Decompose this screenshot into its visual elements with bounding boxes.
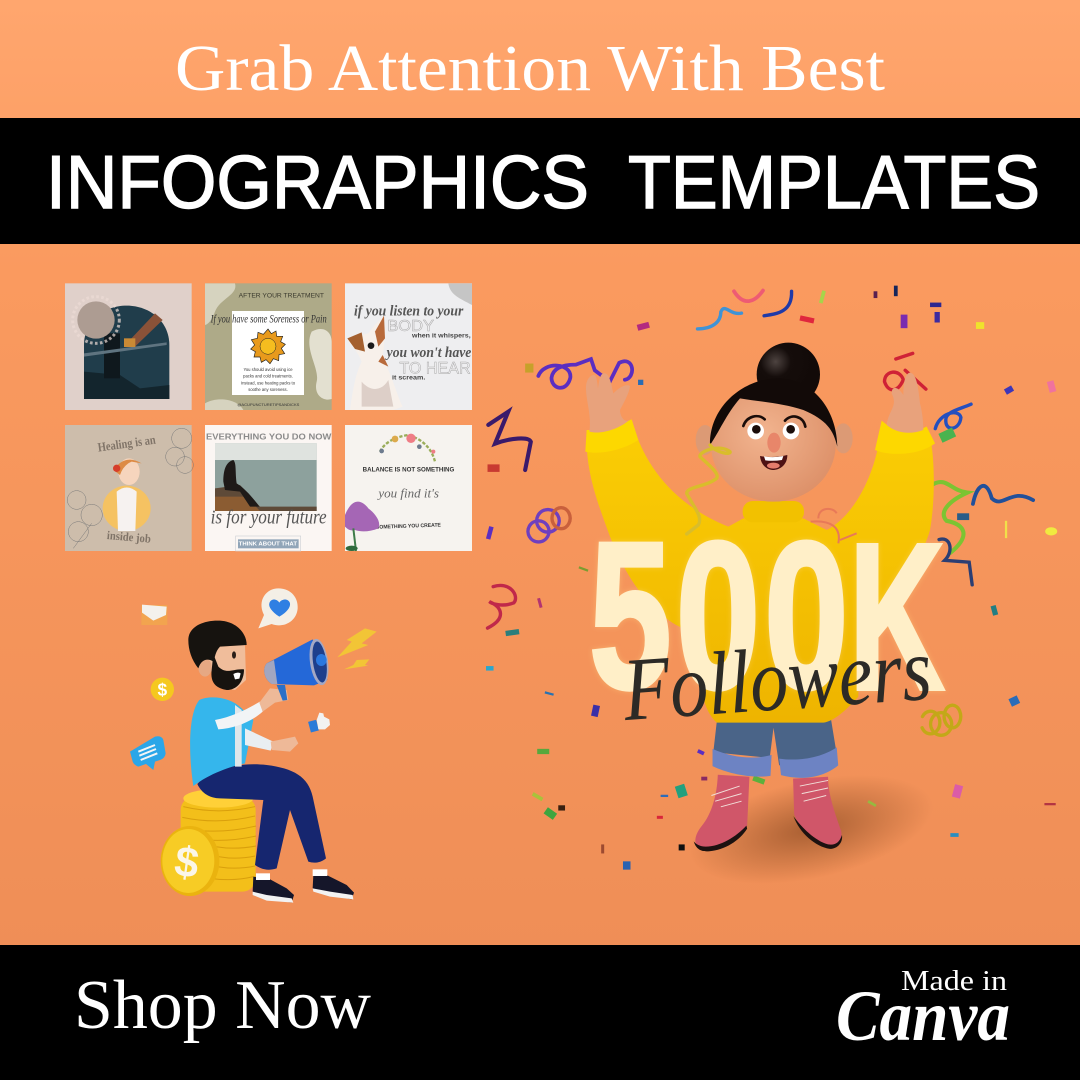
script word Followers: Followers [619, 620, 935, 740]
head [711, 388, 836, 502]
icon: dollar coin small: $ [158, 680, 168, 700]
thumbnail: listen to your body: when it whispers, [411, 333, 471, 340]
icon: chat bubble [130, 736, 166, 770]
thumbnail: everything you do now: THINK ABOUT THAT [239, 541, 298, 547]
character upper body, 500K and Followers [585, 343, 944, 740]
thumbnail: after your treatment: soothe any soreness. [248, 387, 288, 392]
template thumbnails grid [65, 283, 472, 551]
banner: infographics templates: INFOGRAPHICS [46, 140, 589, 224]
megaphone [264, 638, 331, 701]
thumbnail: listen to your body: you won't have [385, 345, 472, 361]
beard [211, 654, 244, 690]
illustration: man with megaphone on coins [130, 588, 377, 903]
arm lower [245, 728, 273, 751]
sweater body and arms [585, 419, 935, 723]
icon: heart speech bubble [258, 588, 298, 628]
thumbnail: balance: BALANCE IS NOT SOMETHING [363, 467, 455, 473]
big number 500K: K [849, 501, 944, 734]
boots [694, 775, 842, 851]
icon: dollar coin small [151, 678, 174, 701]
hair [710, 378, 837, 447]
thumbnail: everything you do now: is for your future [211, 506, 327, 528]
thumbnail: healing: Healing is an [97, 433, 157, 455]
big dollar coin: $ [172, 837, 202, 888]
thumbnail: healing: inside job [106, 528, 152, 546]
man figure [188, 621, 354, 903]
shorts [713, 713, 838, 778]
ground shadow [679, 756, 943, 903]
hair bun [757, 343, 820, 406]
confetti and lower body of character [486, 286, 1057, 903]
thumbnail: balance [345, 425, 472, 551]
big number 500K: 5 [589, 499, 671, 732]
thumbnail: after your treatment: You should avoid using ice [243, 367, 293, 372]
thumbnail: arch photo [65, 283, 192, 410]
coin stack [181, 789, 256, 892]
ear left [696, 425, 714, 455]
thumbnail: listen to your body: BODY [387, 318, 434, 335]
shirt [190, 697, 253, 786]
trousers [197, 764, 326, 870]
footer bar [0, 945, 1080, 1080]
right hand [887, 373, 923, 433]
thumbnail: after your treatment: Instead, use heating packs to [241, 380, 296, 385]
thumbnail: everything you do now: EVERYTHING YOU DO NOW [206, 432, 331, 442]
face [743, 416, 805, 470]
thumbnail: healing [65, 425, 193, 551]
big number 500K [589, 499, 944, 734]
icon: thumbs up [308, 713, 330, 733]
big number 500K: 0 [764, 499, 848, 732]
confetti near collar [811, 509, 857, 543]
ribbon on face [687, 445, 730, 534]
thumbnail: after your treatment: @ACUPUNCTURETIPSANDICKS [237, 403, 300, 407]
big number 500K: 0 [676, 499, 760, 732]
icon: envelope [141, 605, 167, 625]
ear right [834, 423, 853, 453]
head [207, 645, 246, 690]
thumbnail: balance: SOMETHING YOU CREATE [376, 523, 441, 531]
call to action: shop now: Shop Now [74, 967, 371, 1044]
hair [188, 621, 247, 668]
thumbnail: after your treatment: packs and cold treatments. [243, 374, 293, 379]
left hand [586, 373, 630, 433]
thumbnail: balance: you find it's [376, 487, 439, 501]
thumbnail: listen to your body [345, 283, 472, 410]
banner: infographics templates: TEMPLATES [628, 140, 1040, 224]
shoes [253, 877, 294, 903]
thumbnail: listen to your body: TO HEAR [399, 359, 471, 378]
made in canva logo: Canva [836, 976, 1010, 1056]
thumbnail: everything you do now [205, 425, 332, 551]
thumbnail: after your treatment [205, 283, 332, 410]
thumbnail: after your treatment: AFTER YOUR TREATMENT [239, 293, 324, 300]
confetti [488, 291, 1033, 735]
thumbnail: listen to your body: if you listen to your [354, 304, 464, 320]
made in canva logo: Made in [901, 965, 1008, 997]
heading: grab attention: Grab Attention With Best [175, 32, 885, 105]
icon: lightning bolts [337, 628, 377, 669]
thumbnail: listen to your body: it scream. [392, 375, 426, 382]
big dollar coin [161, 826, 219, 896]
thumbnail: after your treatment: If you have some Soreness or Pain [210, 313, 327, 325]
banner: infographics templates [0, 118, 1080, 244]
arm upper [215, 702, 263, 729]
